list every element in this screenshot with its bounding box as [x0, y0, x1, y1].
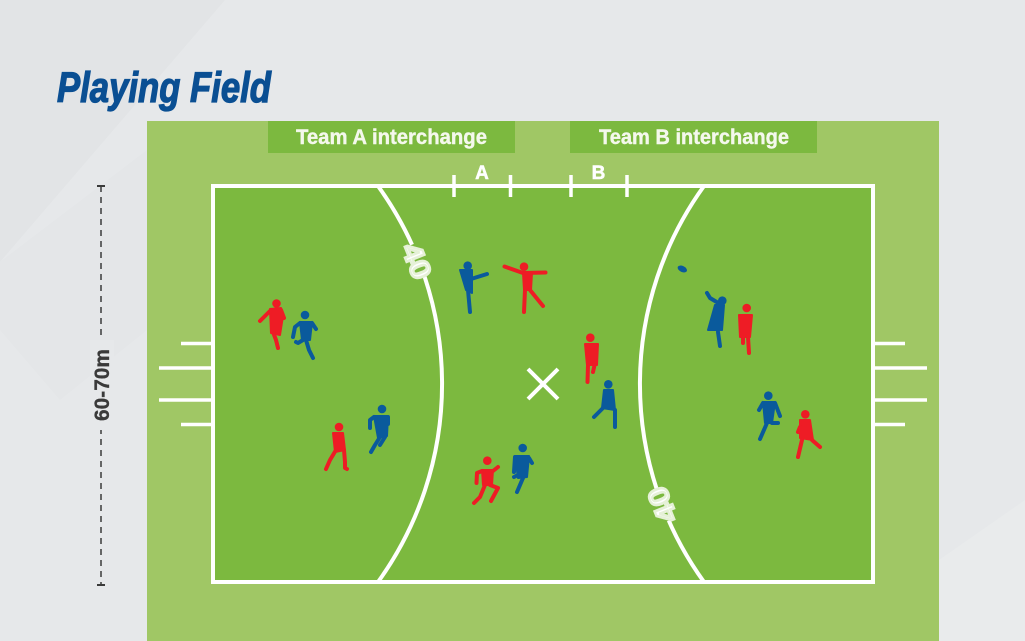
- player: red centre bottom: [474, 457, 498, 503]
- player: red arms spread: [504, 263, 546, 312]
- player: blue right bottom: [759, 392, 780, 439]
- gate label A: A: [475, 163, 489, 184]
- left 40m arc: [378, 186, 442, 582]
- right goal posts: [873, 344, 927, 424]
- gate label B: B: [592, 163, 605, 184]
- Team A interchange label: Team A interchange: [296, 126, 487, 149]
- player: red left top: [260, 300, 284, 348]
- interchange gates: [454, 175, 627, 197]
- player: red left bottom: [326, 423, 347, 469]
- left 40 marker: 40: [395, 239, 438, 284]
- playing surface with boundary: [213, 186, 873, 582]
- right 40m arc: [640, 186, 704, 582]
- dimension: field width: [90, 186, 114, 585]
- Team A interchange label: [268, 121, 515, 153]
- player: blue catcher: [707, 293, 726, 346]
- player: red right top: [739, 304, 752, 353]
- player: red right bottom: [798, 410, 820, 457]
- icon: ball: [677, 264, 688, 274]
- Team B interchange label: [570, 121, 817, 153]
- outer field surround: [147, 121, 939, 641]
- dimension: field width: 60-70m: [91, 349, 114, 421]
- panel: playing field: [147, 121, 939, 641]
- right 40 marker: 40: [641, 482, 684, 527]
- player: blue left top: [293, 311, 316, 358]
- title: Playing Field: [57, 64, 272, 112]
- player: blue left bottom: [370, 405, 388, 452]
- player: blue centre bottom: [514, 444, 532, 492]
- player: red centre right: [585, 334, 598, 382]
- player: blue centre right: [594, 380, 615, 427]
- left goal posts: [159, 344, 213, 424]
- player: blue kicker: [460, 262, 487, 312]
- Team B interchange label: Team B interchange: [599, 126, 789, 149]
- centre cross: [528, 369, 558, 399]
